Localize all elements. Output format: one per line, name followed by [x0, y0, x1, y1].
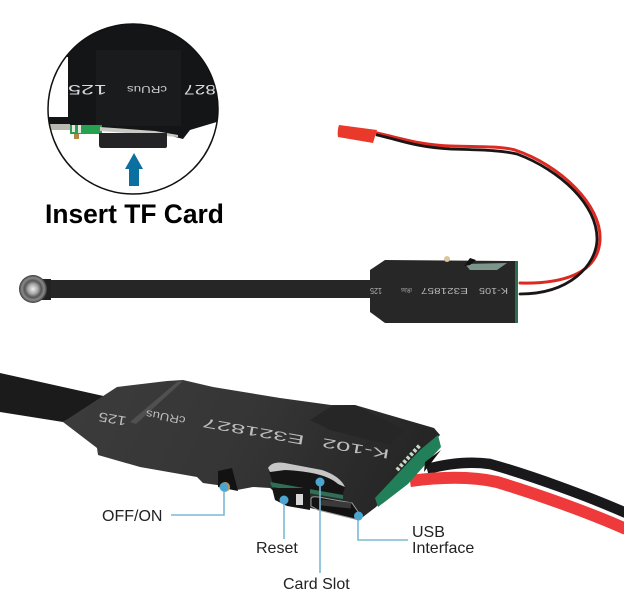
- inset circle: insert TF card close-up: cRUus: [127, 83, 167, 94]
- inset circle: insert TF card close-up: [47, 23, 219, 195]
- module printing: 125: [370, 286, 382, 295]
- callout: OFF/ON: [102, 482, 228, 525]
- upper device: camera module with cable: [19, 125, 600, 323]
- callout: Card Slot: [283, 478, 350, 593]
- wires and connector: [377, 133, 600, 294]
- module printing: cRUus: [144, 407, 187, 426]
- module printing: K-102: [321, 435, 391, 462]
- heading: Insert TF Card: Insert TF Card: [45, 199, 224, 229]
- module printing: [370, 286, 508, 295]
- wires: [410, 463, 624, 529]
- callout: OFF/ON: OFF/ON: [102, 508, 162, 525]
- arrow: insert direction: [125, 153, 143, 186]
- card slot: [268, 463, 345, 497]
- inset circle: insert TF card close-up: 827: [184, 82, 216, 98]
- callout: USB Interface: Interface: [412, 540, 474, 557]
- red connector: [338, 125, 377, 143]
- module printing: cRUus: [401, 286, 412, 292]
- module printing: [97, 407, 391, 462]
- module body: [63, 380, 440, 520]
- lens: [19, 275, 51, 303]
- power switch: [218, 468, 238, 491]
- callout: USB Interface: USB: [412, 524, 445, 541]
- module printing: K-105: [478, 286, 508, 295]
- module printing: E321857: [420, 286, 468, 295]
- callout: Card Slot: Card Slot: [283, 576, 350, 593]
- callout: Reset: [256, 496, 298, 557]
- module PCB edge and slot: [515, 261, 518, 323]
- module body: [370, 260, 515, 323]
- module printing: E321827: [201, 415, 306, 448]
- fabric ribbon: [0, 373, 108, 422]
- module printing: 125: [97, 409, 128, 429]
- reset button: [272, 488, 310, 510]
- green circuit board: [375, 435, 441, 507]
- callout: Reset: Reset: [256, 540, 298, 557]
- inset circle: insert TF card close-up: 125: [68, 82, 107, 98]
- USB port: [311, 497, 361, 520]
- lower device: enlarged module with ports: [0, 373, 624, 529]
- memory card: [99, 133, 167, 148]
- flat ribbon: [46, 280, 374, 298]
- callout: USB Interface: [354, 512, 474, 557]
